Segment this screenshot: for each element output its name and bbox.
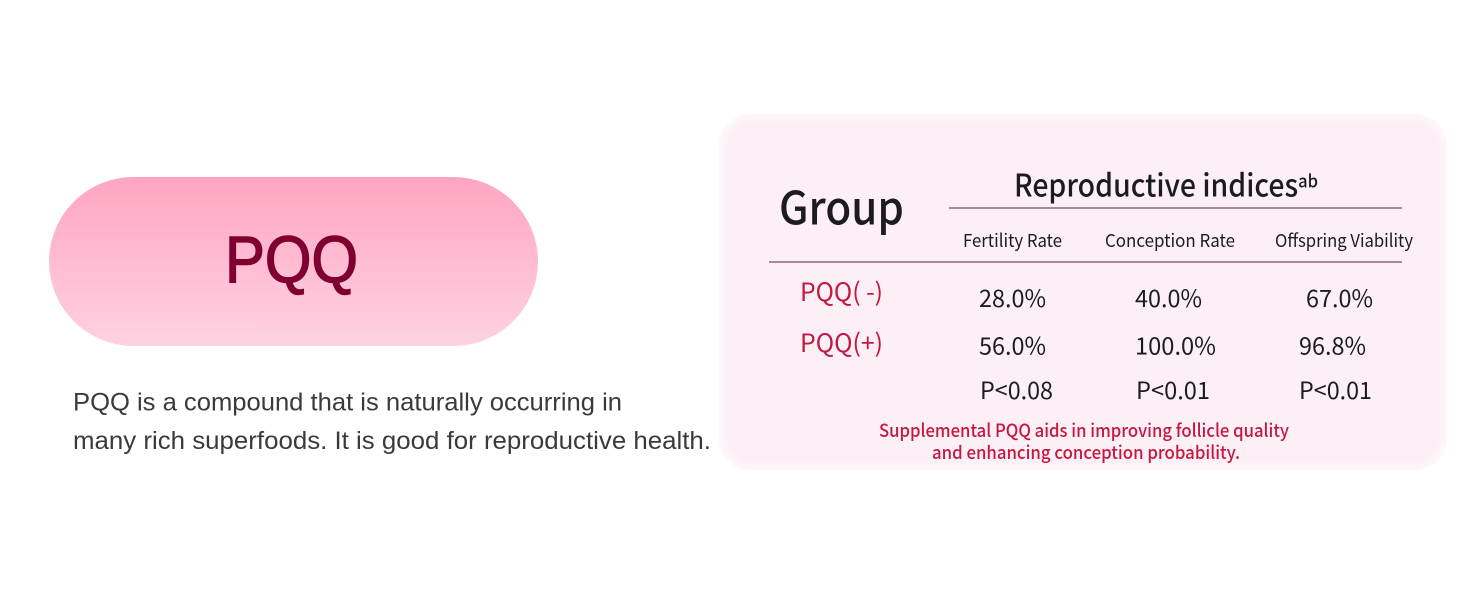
panel: reproductive indices table [719,114,1447,470]
row: PQQ(-): PQQ( -) [800,273,883,309]
row: PQQ(-): 28.0% [979,279,1046,314]
pill title: PQQ [225,222,358,296]
description text: PQQ is a compound that is naturally occurring in [73,388,622,416]
description text [73,388,711,455]
row: p-values: P<0.01 [1136,371,1210,406]
column headers: Fertility Rate [963,227,1062,253]
table heading: Reproductive indices: Reproductive indices [1014,160,1324,206]
row: PQQ(-): 40.0% [1135,279,1202,314]
row: PQQ(+): PQQ(+) [800,324,883,360]
row: p-values [980,371,1372,406]
pill badge: PQQ [49,177,538,346]
column headers: Conception Rate [1105,227,1235,253]
row: PQQ(-): 67.0% [1306,279,1373,314]
conclusion note [879,417,1289,465]
conclusion note: Supplemental PQQ aids in improving follicle quality [879,417,1289,443]
row: p-values: P<0.01 [1299,371,1372,406]
table heading: Reproductive indices: ab [1298,168,1318,194]
row: PQQ(+): 100.0% [1135,326,1216,362]
description text: many rich superfoods. It is good for reproductive health. [73,427,711,455]
column headers: Offspring Viability [1275,227,1414,253]
row: p-values: P<0.08 [980,371,1053,406]
row: PQQ(+) [800,324,1366,362]
table heading: Group: Group [779,172,904,238]
column headers [963,227,1414,253]
conclusion note: and enhancing conception probability. [932,439,1240,465]
row: PQQ(-) [800,273,1373,314]
row: PQQ(+): 96.8% [1299,326,1366,362]
row: PQQ(+): 56.0% [979,326,1046,362]
